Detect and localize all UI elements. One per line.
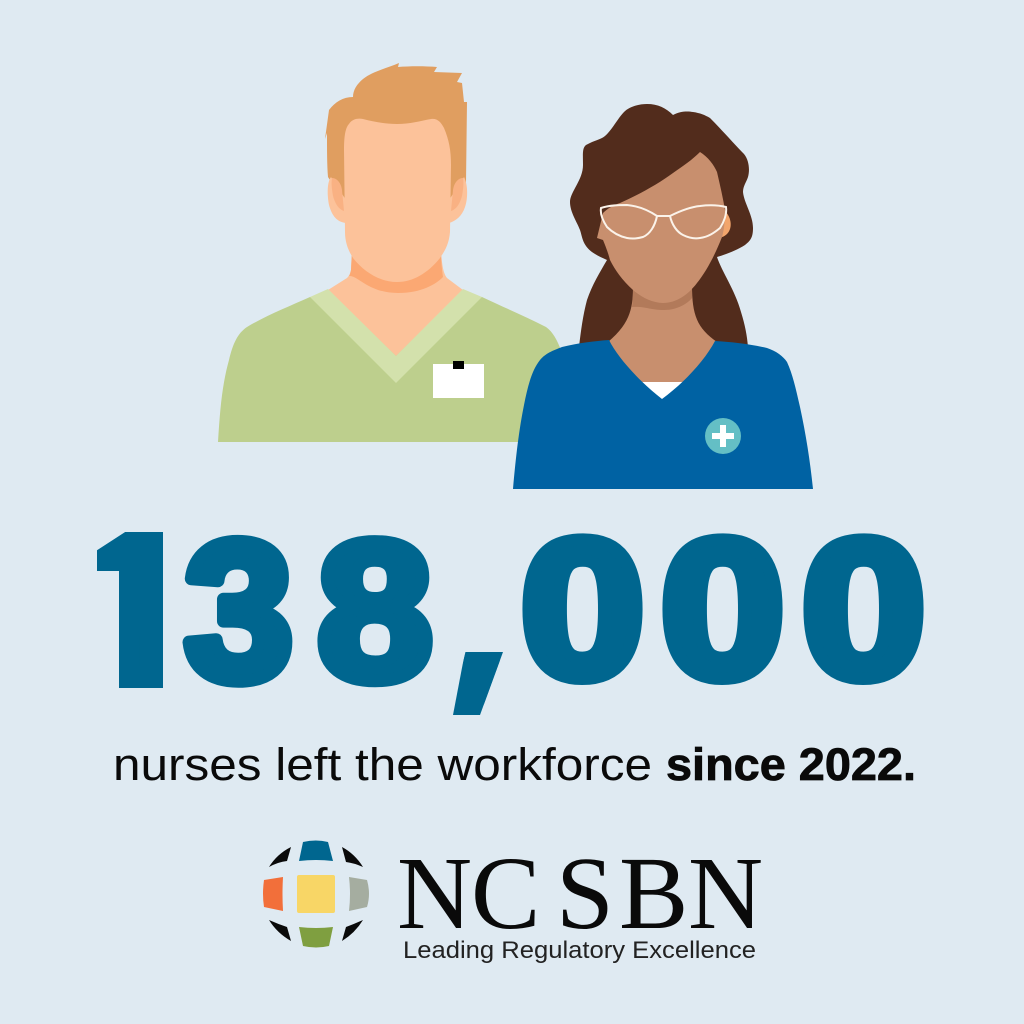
face <box>344 119 451 282</box>
logo: NCSBN <box>263 836 763 964</box>
badge: plus <box>705 418 741 454</box>
neck <box>328 250 463 356</box>
neck shadow <box>349 250 443 293</box>
big number: , <box>456 548 539 715</box>
ear <box>716 208 731 238</box>
glasses <box>601 205 726 239</box>
shirt <box>218 297 561 442</box>
hair <box>570 104 753 347</box>
big number <box>97 532 924 715</box>
big number: 3 <box>184 501 293 721</box>
tagline: Leading Regulatory Excellence <box>403 937 756 964</box>
face <box>597 152 725 303</box>
illustration: female nurse <box>513 104 813 489</box>
wordmark: NCSBN <box>397 836 763 951</box>
caption <box>113 739 916 790</box>
caption: nurses left the workforce <box>113 739 652 790</box>
badge <box>433 361 484 398</box>
big number: 1 <box>82 502 190 720</box>
caption: since 2022. <box>666 739 916 790</box>
scrub top <box>513 340 813 489</box>
illustration: male nurse <box>218 63 561 442</box>
neck <box>608 285 717 402</box>
big number: 8 <box>318 501 433 721</box>
logo mark <box>263 840 369 948</box>
neck shadow <box>632 285 692 310</box>
hair <box>325 63 467 202</box>
undershirt <box>630 382 695 402</box>
big number: 0 <box>660 498 785 719</box>
collar <box>310 289 482 383</box>
ears <box>328 177 467 223</box>
big number: 0 <box>802 498 926 719</box>
big number: 0 <box>520 498 645 719</box>
